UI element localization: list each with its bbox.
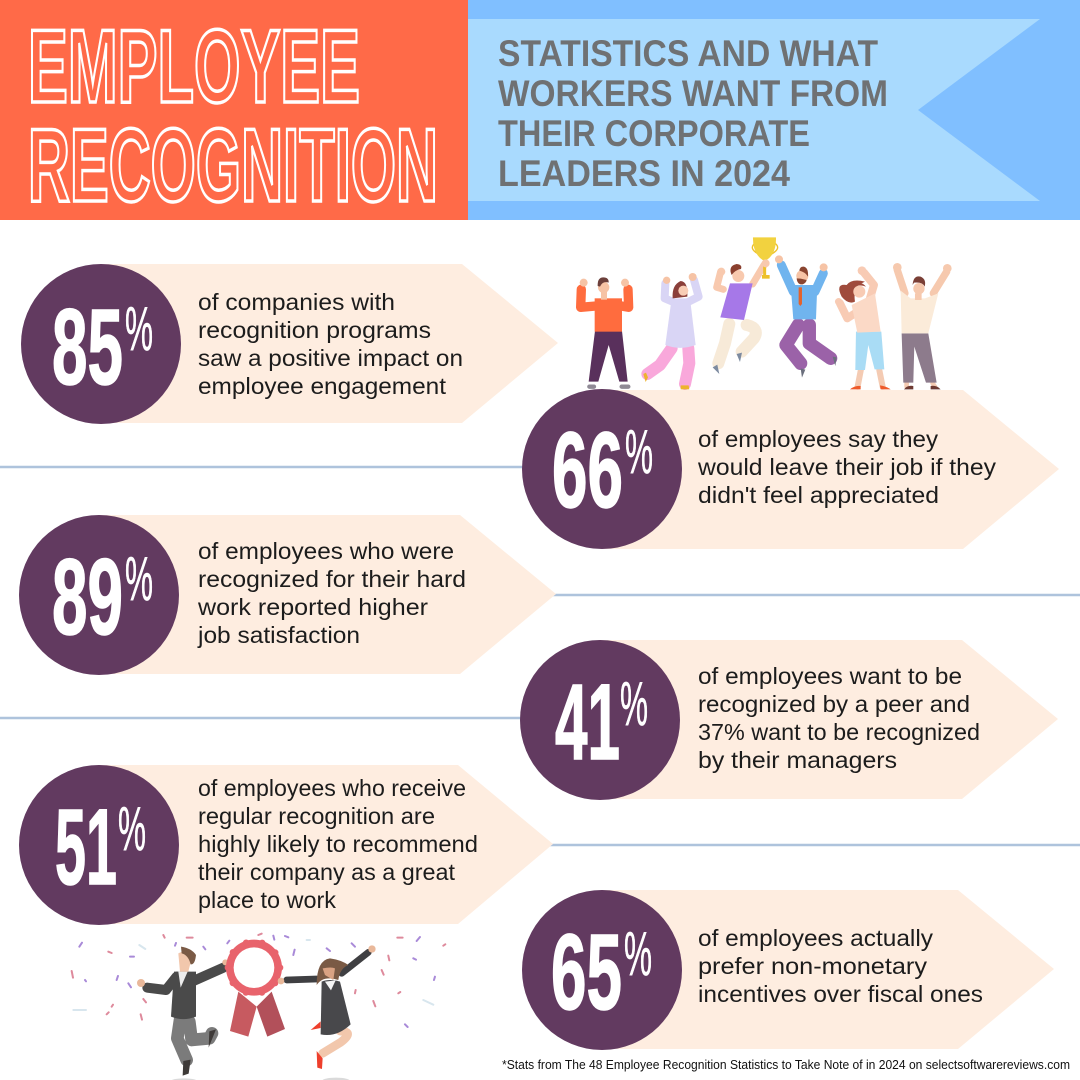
title panel — [0, 0, 468, 224]
woman — [278, 945, 376, 1069]
stat number 65%: % — [624, 920, 652, 989]
stat number 41%: % — [620, 670, 648, 739]
man — [137, 947, 228, 1076]
stat number 65%: 65 — [551, 911, 622, 1032]
stat number 85%: % — [125, 295, 153, 364]
subtitle text: THEIR CORPORATE — [498, 113, 810, 154]
confetti — [72, 934, 445, 1027]
person 3 with trophy — [713, 237, 778, 374]
stat text 65%: incentives over fiscal ones — [698, 981, 983, 1007]
stat text 65%: of employees actually — [698, 925, 934, 951]
stat text 85%: of companies with — [198, 289, 395, 315]
stat text 51%: of employees who receive — [198, 775, 466, 801]
stat text 89%: work reported higher — [197, 594, 428, 620]
panel: 89% — [19, 515, 556, 675]
stat text 41% — [698, 663, 980, 773]
stat text 41%: by their managers — [698, 747, 897, 773]
stat text 41%: recognized by a peer and — [698, 691, 970, 717]
stat number 66%: 66 — [552, 409, 623, 530]
stat text 66%: of employees say they — [698, 426, 939, 452]
stat text 66%: would leave their job if they — [697, 454, 997, 480]
stat text 89%: recognized for their hard — [198, 566, 466, 592]
subtitle banner — [468, 0, 1080, 220]
panel: 85% — [21, 264, 558, 424]
stat text 51%: regular recognition are — [198, 803, 435, 829]
panel: 65% — [522, 890, 1054, 1050]
stat text 51%: their company as a great — [198, 859, 456, 885]
stat text 51% — [198, 775, 478, 913]
stat text 66% — [697, 426, 997, 508]
stat text 85% — [198, 289, 463, 399]
subtitle text: STATISTICS AND WHAT — [498, 33, 878, 74]
stat text 51%: place to work — [198, 887, 337, 913]
subtitle text: WORKERS WANT FROM — [498, 73, 888, 114]
stat text 85%: employee engagement — [198, 373, 447, 399]
subtitle text: LEADERS IN 2024 — [498, 153, 790, 194]
panel: 51% — [19, 765, 553, 925]
stat text 65%: prefer non-monetary — [698, 953, 928, 979]
illustration: two colleagues with award rosette and confetti — [72, 934, 445, 1080]
stat number 41%: 41 — [555, 661, 620, 782]
stat number 66%: % — [625, 418, 653, 487]
person 6 — [893, 263, 952, 389]
stat number 51%: % — [118, 795, 146, 864]
stat text 66%: didn't feel appreciated — [698, 482, 939, 508]
stat number 89%: 89 — [52, 536, 123, 657]
stat text 85%: saw a positive impact on — [198, 345, 463, 371]
stat number 51%: 51 — [55, 786, 117, 907]
stat text 85%: recognition programs — [198, 317, 431, 343]
stat number 89%: % — [125, 545, 153, 614]
title: RECOGNITION — [28, 108, 438, 224]
stat text 41%: 37% want to be recognized — [698, 719, 980, 745]
subtitle text — [498, 33, 888, 194]
stat text 51%: highly likely to recommend — [198, 831, 478, 857]
stat text 89% — [197, 538, 466, 648]
panel: 41% — [520, 640, 1058, 800]
person 5 — [835, 266, 891, 389]
title — [28, 9, 438, 224]
illustration: celebrating team with trophy — [580, 237, 952, 389]
person 2 — [643, 273, 699, 389]
panel: 66% — [522, 389, 1059, 549]
stat text 89%: of employees who were — [198, 538, 454, 564]
person 4 — [775, 255, 837, 378]
stat text 89%: job satisfaction — [197, 622, 360, 648]
rosette — [226, 940, 285, 1037]
stat text 41%: of employees want to be — [698, 663, 962, 689]
stat text 65% — [698, 925, 983, 1007]
person 1 — [580, 277, 629, 387]
stat number 85%: 85 — [52, 286, 123, 407]
title: EMPLOYEE — [28, 9, 360, 125]
